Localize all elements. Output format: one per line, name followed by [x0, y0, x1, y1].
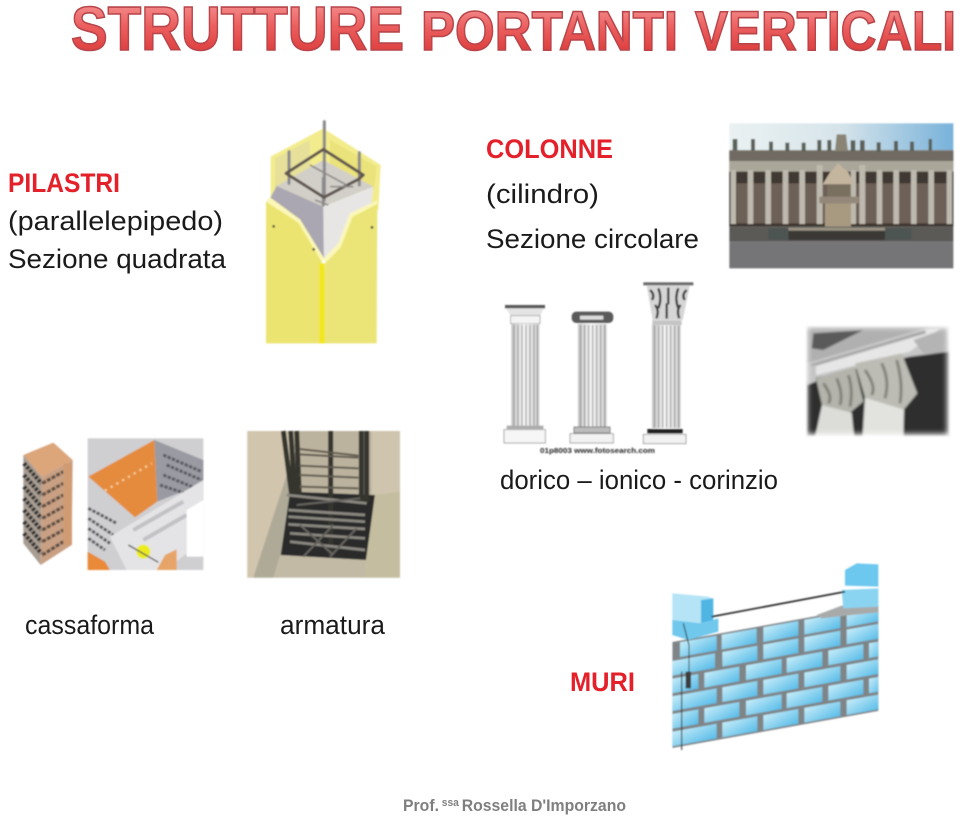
label: cassaforma: cassaforma	[25, 610, 155, 640]
label: armatura: armatura	[280, 610, 386, 640]
footer: author credit: Rossella D'Imporzano	[462, 796, 626, 815]
text block: column orders caption: dorico – ionico - corinzio	[500, 465, 778, 495]
formwork box view	[88, 438, 203, 570]
text block: pilastri: Sezione quadrata	[8, 244, 227, 274]
illustration: pillar with yellow formwork	[266, 122, 381, 343]
illustration: doric, ionic and corinthian columns	[504, 282, 693, 455]
text block: pilastri: (parallelepipedo)	[8, 206, 223, 236]
text block: colonne: (cilindro)	[486, 179, 599, 209]
ionic column	[570, 312, 613, 443]
formwork column	[23, 443, 73, 565]
photo: colonnade with fountain	[729, 123, 953, 268]
text block: pilastri: PILASTRI	[8, 168, 120, 198]
footer: author credit: Prof.	[403, 796, 442, 815]
title: PORTANTI	[421, 0, 678, 62]
label: muri: MURI	[570, 667, 635, 697]
text block: colonne: COLONNE	[486, 134, 613, 164]
text block: colonne	[486, 134, 699, 254]
doric column	[504, 305, 545, 443]
text block: colonne: Sezione circolare	[486, 224, 699, 254]
photo: rebar armatura	[247, 431, 400, 578]
image caption: 01p8003 www.fotosearch.com	[540, 448, 655, 455]
title	[71, 0, 956, 64]
vignette edge	[804, 324, 951, 437]
text block: pilastri	[8, 168, 227, 274]
corinthian column	[643, 282, 693, 444]
footer: author credit: ssa	[439, 797, 462, 809]
illustration: formwork cassaforma	[23, 438, 203, 570]
illustration: brick wall	[672, 563, 882, 750]
photo: corinthian capitals	[804, 324, 951, 437]
